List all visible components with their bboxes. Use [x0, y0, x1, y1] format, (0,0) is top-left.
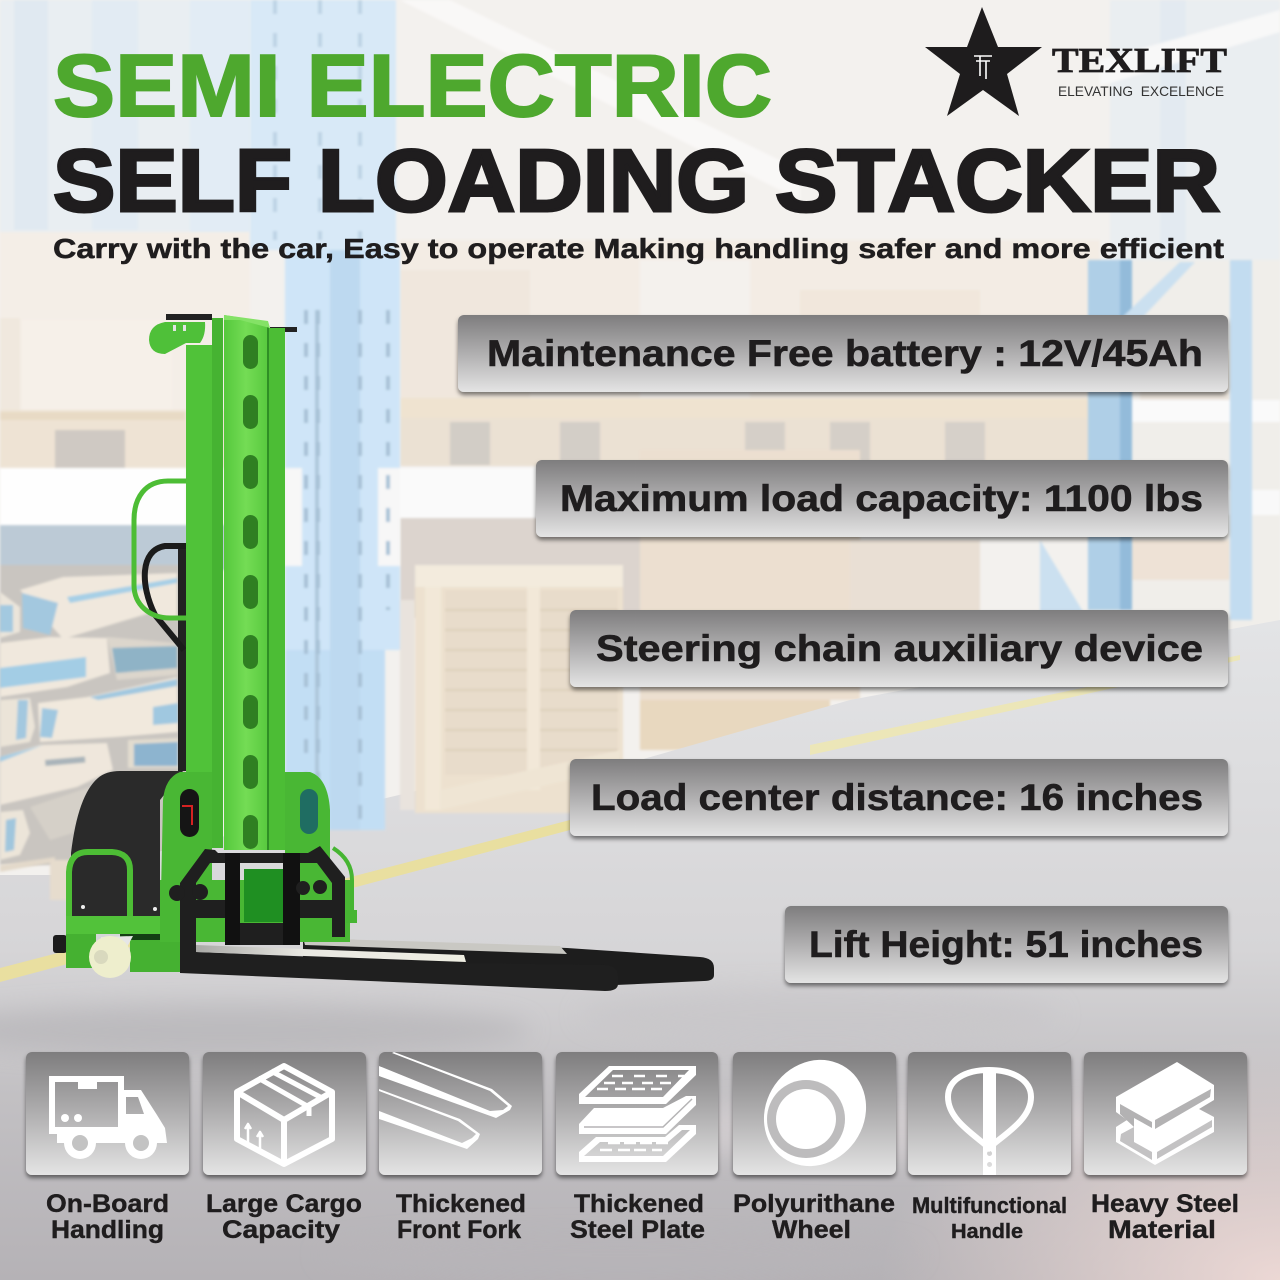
front fork: [180, 945, 618, 991]
feature: thickened steel plate: Thickened: [574, 1190, 704, 1218]
spec bar: lift height: [785, 906, 1228, 983]
base platform: [53, 880, 350, 972]
spec bar: load capacity: Maximum load capacity: 1100 lbs: [560, 478, 1203, 519]
mast: [186, 315, 285, 850]
feature: multifunctional handle: Handle: [951, 1221, 1023, 1243]
logo star: [925, 7, 1042, 116]
icon: steel I-beam: [1116, 1062, 1214, 1165]
caster wheel: [89, 936, 133, 978]
icon: wheel: [743, 1040, 887, 1186]
feature: large cargo capacity: Capacity: [222, 1216, 340, 1244]
feature: heavy steel material: Heavy Steel: [1091, 1190, 1239, 1218]
feature: polyurethane wheel: Wheel: [772, 1216, 851, 1244]
wooden crate: [415, 565, 623, 813]
title line 1: SEMI ELECTRIC: [53, 36, 772, 135]
feature: thickened front fork: [379, 1052, 542, 1244]
right teal window: [300, 789, 318, 834]
spec bar: load capacity: [536, 460, 1228, 537]
feature: multifunctional handle: [908, 1052, 1071, 1243]
title line 2: SELF LOADING STACKER: [53, 131, 1220, 230]
yellow floor line far section: [810, 655, 1240, 755]
right side panel: [285, 772, 330, 935]
feature: on-board handling: [26, 1052, 189, 1244]
feature: on-board handling: On-Board: [46, 1190, 169, 1218]
battery window with wiring: [180, 789, 199, 837]
icon: box: [237, 1066, 332, 1164]
pink glow: [780, 980, 1280, 1280]
feature: thickened steel plate: [556, 1052, 718, 1244]
top cap bracket: [149, 314, 297, 354]
logo monogram: [974, 56, 992, 79]
spec bar: lift height: Lift Height: 51 inches: [809, 924, 1203, 965]
icon: handle: [948, 1068, 1031, 1175]
mast slots: [243, 335, 258, 849]
spec bar: battery: [458, 315, 1228, 392]
grab handle tube: [134, 481, 188, 618]
rear fork: [303, 938, 714, 985]
feature: heavy steel material: Material: [1108, 1216, 1216, 1244]
feature: polyurethane wheel: Polyurithane: [733, 1190, 895, 1218]
yellow floor line: [0, 820, 570, 982]
feature: polyurethane wheel: [733, 1040, 896, 1244]
feature: thickened front fork: Thickened: [396, 1190, 526, 1218]
control tiller black post and cable: [145, 546, 187, 771]
feature: multifunctional handle: Multifunctional: [912, 1193, 1067, 1218]
stacker machine: [53, 314, 714, 991]
feature: heavy steel material: [1084, 1052, 1247, 1244]
blue rack columns: [250, 0, 1252, 830]
icon: stacked plates: [579, 1066, 696, 1162]
icon: fork blades: [379, 1052, 512, 1149]
cement bags: [0, 573, 180, 900]
feature: large cargo capacity: [203, 1052, 366, 1244]
spec bar: steering chain: Steering chain auxiliary device: [596, 628, 1203, 669]
guard tube: [69, 852, 130, 916]
black fork carriage frame: [169, 846, 345, 967]
logo wordmark: TEXLIFT: [1052, 41, 1227, 80]
front guard tube: [333, 848, 352, 910]
battery hump cover: [71, 771, 183, 916]
logo tagline: ELEVATING EXCELENCE: [1058, 83, 1224, 99]
spec bar: load center: [570, 759, 1228, 836]
spec bar: steering chain: [570, 610, 1228, 687]
feature: thickened steel plate: Steel Plate: [570, 1216, 705, 1244]
spec bar: battery: Maintenance Free battery : 12V/45Ah: [487, 333, 1203, 374]
spec bar: load center: Load center distance: 16 inches: [591, 777, 1203, 818]
feature: thickened front fork: Front Fork: [397, 1216, 521, 1244]
feature: on-board handling: Handling: [51, 1216, 164, 1244]
left side panel: [160, 772, 212, 940]
logo: [925, 7, 1227, 116]
subtitle: Carry with the car, Easy to operate Making handling safer and more efficient: [53, 233, 1224, 264]
carriage centre green plate: [244, 869, 283, 922]
floor: [0, 620, 1280, 1280]
icon: truck: [49, 1076, 167, 1159]
feature: large cargo capacity: Large Cargo: [206, 1190, 362, 1218]
